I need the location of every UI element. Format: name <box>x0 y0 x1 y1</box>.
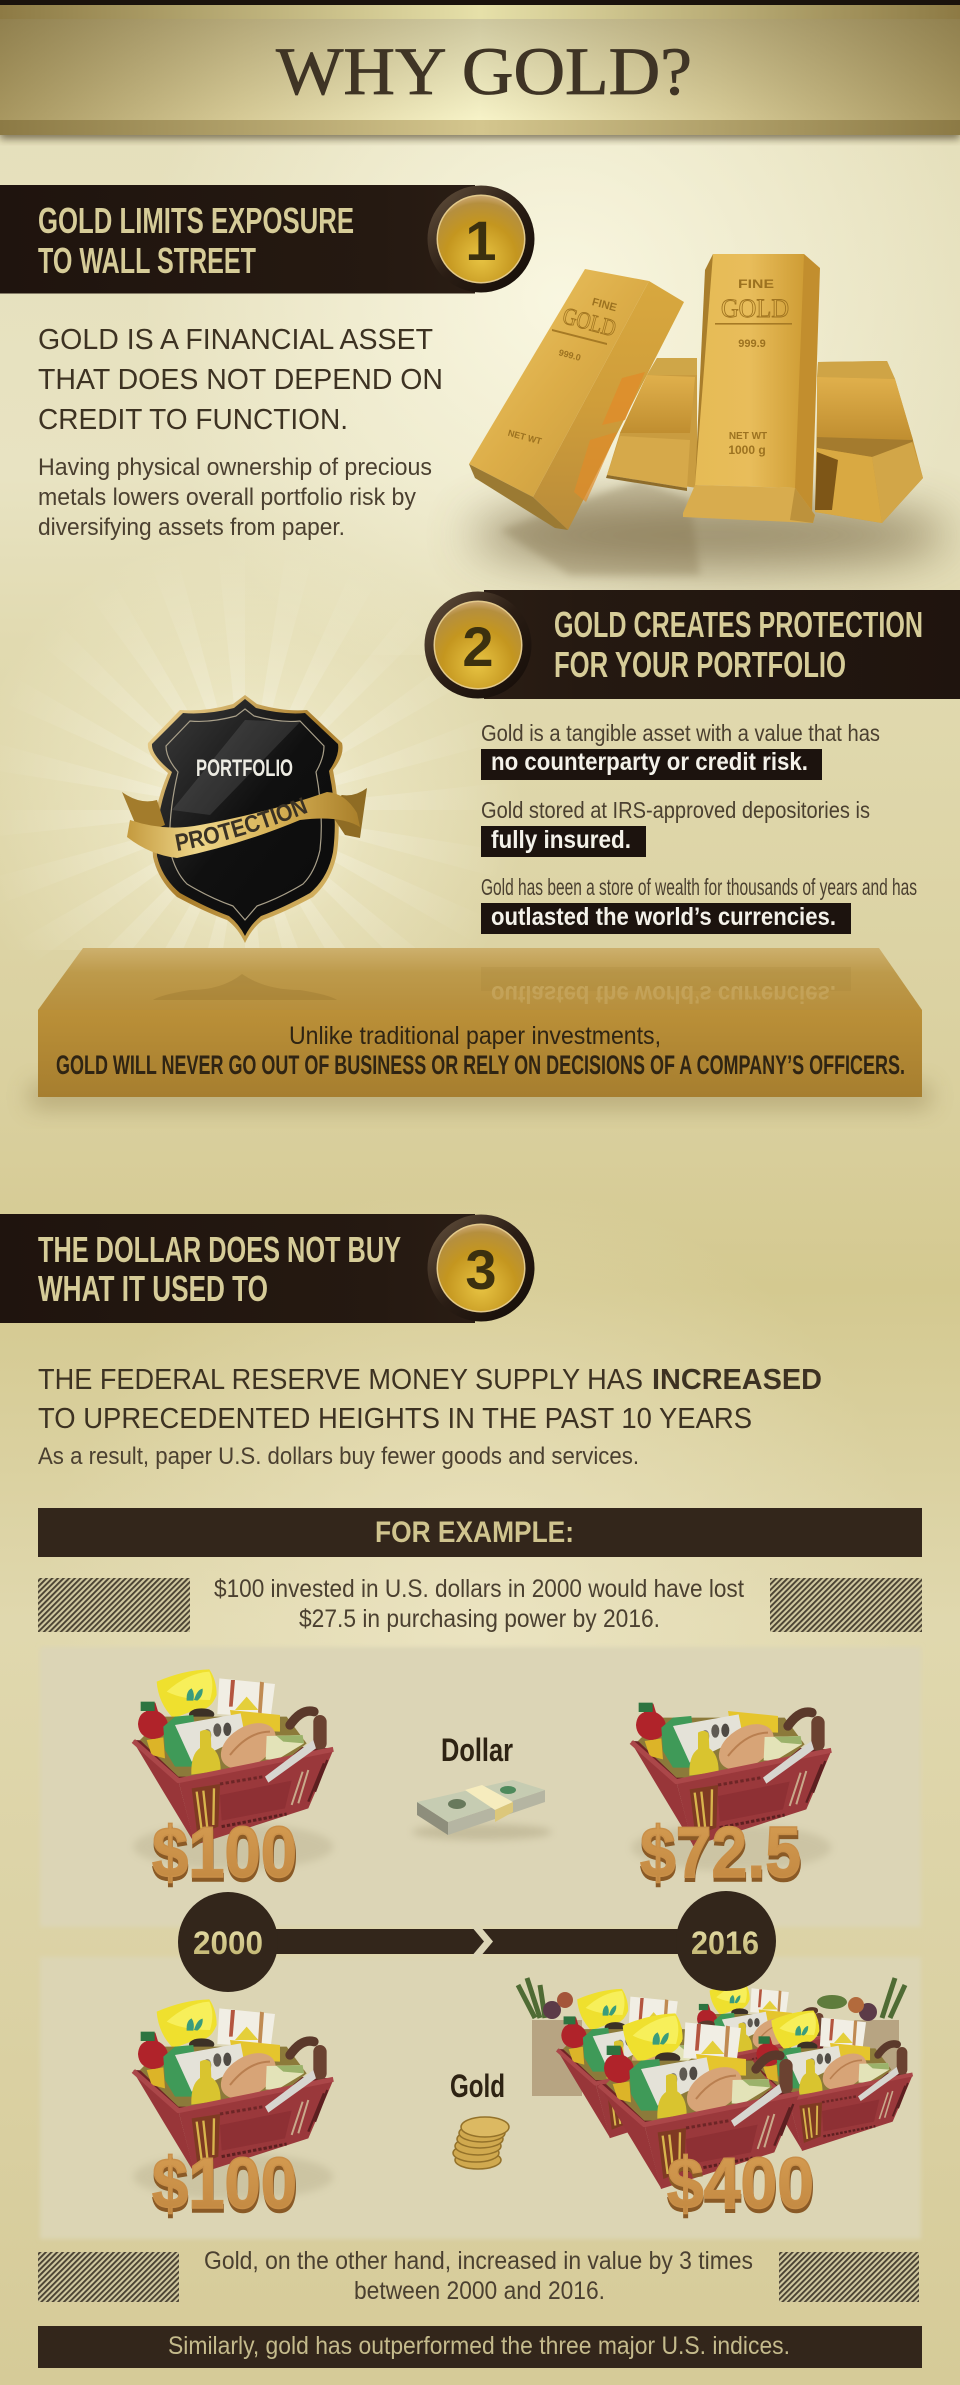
heading banner 1 <box>0 185 475 294</box>
year 2000: 2000 <box>193 1925 263 1961</box>
benefit 3 <box>481 874 917 934</box>
back left bar <box>606 358 697 491</box>
heading banner 1: GOLD LIMITS EXPOSURE <box>38 200 354 241</box>
basket 2016 dollar <box>631 1703 831 1871</box>
number badge 1 <box>428 186 534 292</box>
shield label: PORTFOLIO <box>196 755 293 782</box>
federal reserve statement <box>38 1364 822 1470</box>
number badge 3 <box>428 1214 534 1322</box>
paper bags <box>518 1978 905 2096</box>
value $400: $400 <box>667 2148 815 2228</box>
ribbon: PROTECTION <box>175 797 308 851</box>
front tilted bar: 999.0 <box>558 347 582 363</box>
icon: dollar stack <box>412 1780 552 1840</box>
year 2016: 2016 <box>691 1925 759 1961</box>
center bar: NET WT <box>729 431 767 442</box>
paragraph text: metals lowers overall portfolio risk by <box>38 484 416 511</box>
value $100: $100 <box>152 1817 298 1897</box>
for example bar <box>38 1508 922 1557</box>
back right bar <box>815 361 923 523</box>
value $400: $400 <box>667 2144 814 2224</box>
statement text: CREDIT TO FUNCTION. <box>38 404 348 436</box>
left basket <box>557 1989 727 2138</box>
timeline arrow <box>178 1891 776 1992</box>
front tilted bar: NET WT <box>507 428 543 447</box>
value $100: $100 <box>152 1813 297 1893</box>
federal reserve statement: INCREASED <box>652 1364 822 1396</box>
front tilted bar: GOLD <box>560 303 619 342</box>
back basket <box>694 1982 828 2100</box>
hatch block right <box>770 1578 922 1632</box>
benefit 2 <box>481 797 870 857</box>
center bar: 1000 g <box>728 443 766 457</box>
pedestal reflection <box>153 967 851 1008</box>
value $72.5: $72.5 <box>640 1813 801 1893</box>
benefit list <box>481 720 917 934</box>
benefit 1: no counterparty or credit risk. <box>491 748 808 776</box>
federal reserve statement: TO UPRECEDENTED HEIGHTS IN THE PAST 10 YEARS <box>38 1403 752 1435</box>
paragraph text <box>38 454 432 541</box>
number badge 1: 1 <box>465 209 497 272</box>
example text: $27.5 in purchasing power by 2016. <box>299 1605 660 1633</box>
federal reserve statement: As a result, paper U.S. dollars buy fewer goods and services. <box>38 1443 639 1470</box>
value $72.5: $72.5 <box>640 1817 802 1897</box>
for example bar: FOR EXAMPLE: <box>375 1516 574 1549</box>
statement text <box>38 324 443 436</box>
center bar: 999.9 <box>738 338 766 350</box>
section 2: portfolio protection <box>8 586 960 1116</box>
title text: WHY GOLD? <box>276 33 692 109</box>
number badge 3: 3 <box>465 1238 497 1301</box>
heading banner 3: THE DOLLAR DOES NOT BUY <box>38 1229 401 1270</box>
closing bar <box>38 2326 922 2368</box>
value $100 gold: $100 <box>152 2144 297 2224</box>
sunburst behind shield <box>0 530 530 952</box>
paragraph text: diversifying assets from paper. <box>38 514 345 541</box>
heading banner 1: TO WALL STREET <box>38 240 256 281</box>
heading banner 3: WHAT IT USED TO <box>38 1268 268 1309</box>
center bar: GOLD <box>721 294 789 323</box>
benefit 1: Gold is a tangible asset with a value that has <box>481 720 880 746</box>
illustration: gold bars <box>469 254 950 575</box>
groceries 2016 gold <box>518 1978 913 2189</box>
gold summary text: between 2000 and 2016. <box>354 2277 605 2305</box>
federal reserve statement: THE FEDERAL RESERVE MONEY SUPPLY HAS <box>38 1364 643 1396</box>
heading banner 2: FOR YOUR PORTFOLIO <box>554 644 846 685</box>
center bar <box>683 254 820 523</box>
number badge 2 <box>424 592 532 698</box>
benefit 1 <box>481 720 880 780</box>
value $100 gold: $100 <box>152 2148 298 2228</box>
center bar: FINE <box>738 277 774 291</box>
right basket <box>753 2010 913 2151</box>
icon: coin stack <box>453 2117 509 2169</box>
heading banner 3 <box>0 1214 475 1323</box>
statement text: THAT DOES NOT DEPEND ON <box>38 364 443 396</box>
pedestal reflection: outlasted the world’s currencies. <box>491 980 836 1008</box>
heading banner 2 <box>484 590 960 699</box>
dollar label: Dollar <box>441 1732 513 1768</box>
title banner <box>0 0 960 139</box>
hatch block left <box>38 1578 190 1632</box>
gold label: Gold <box>450 2068 505 2104</box>
ribbon <box>122 788 367 858</box>
icon: protection shield <box>122 695 367 943</box>
gold summary text: Gold, on the other hand, increased in value by 3 times <box>204 2247 753 2275</box>
paragraph text: Having physical ownership of precious <box>38 454 432 481</box>
closing bar: Similarly, gold has outperformed the three major U.S. indices. <box>168 2332 790 2360</box>
pedestal <box>30 948 930 1107</box>
hatch block lower left <box>38 2252 179 2302</box>
benefit 2: Gold stored at IRS-approved depositories is <box>481 797 870 823</box>
basket 2000 dollar <box>133 1669 333 1870</box>
benefit 2: fully insured. <box>491 826 631 854</box>
number badge 2: 2 <box>462 615 494 678</box>
comparison panel: dollar <box>40 1647 921 1927</box>
gold summary text <box>204 2247 753 2305</box>
comparison panel: gold <box>40 1957 921 2239</box>
front tilted bar: FINE <box>591 296 618 314</box>
front basket <box>599 2013 799 2189</box>
benefit 3: outlasted the world’s currencies. <box>491 903 836 931</box>
basket 2000 gold <box>133 1999 333 2200</box>
example text: $100 invested in U.S. dollars in 2000 would have lost <box>214 1575 744 1603</box>
pedestal text: Unlike traditional paper investments, <box>289 1022 661 1050</box>
section 3: the dollar <box>0 1214 922 2368</box>
section 1: gold limits exposure <box>0 185 950 575</box>
statement text: GOLD IS A FINANCIAL ASSET <box>38 324 433 356</box>
example text <box>214 1575 744 1633</box>
hatch block lower right <box>779 2252 919 2302</box>
front tilted bar <box>469 269 684 530</box>
